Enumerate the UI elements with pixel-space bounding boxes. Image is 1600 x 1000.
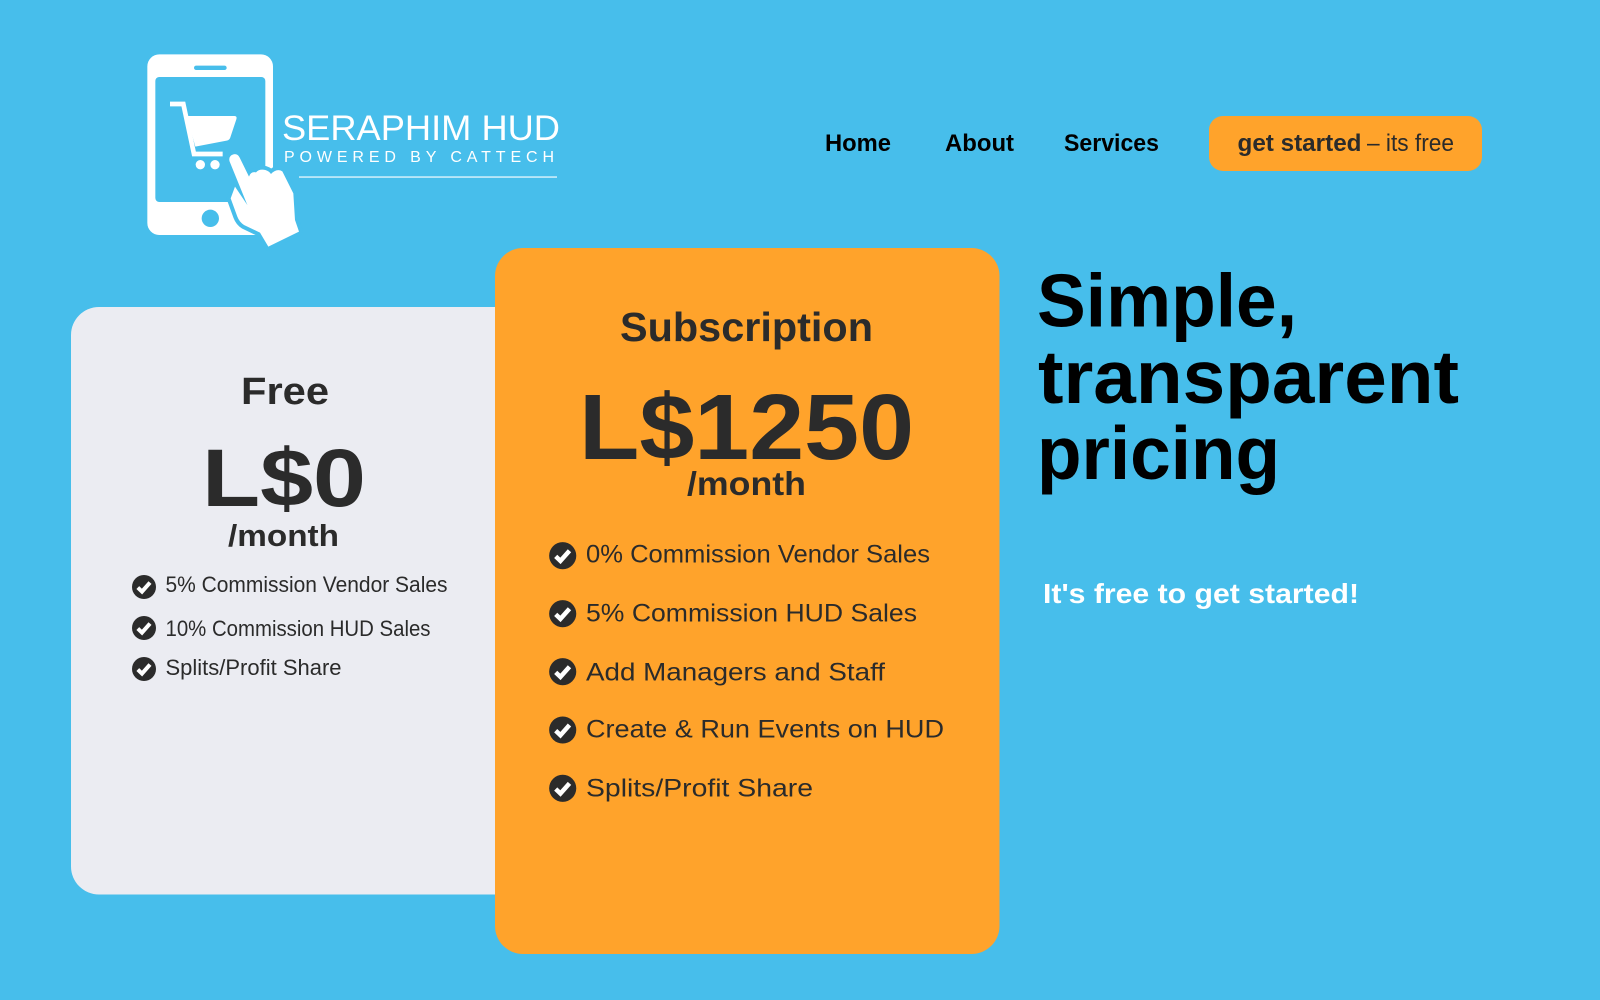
headline: transparent [1038,335,1459,419]
feature list: 0% Commission Vendor Sales [586,541,930,569]
headline: Simple, [1037,259,1297,343]
price: L$0: L$0 [202,433,366,524]
nav link: About: About [945,130,1014,157]
feature list: Create & Run Events on HUD [586,715,944,743]
panel: free plan [71,307,531,894]
feature list: 5% Commission HUD Sales [586,600,917,628]
logo wordmark: SERAPHIM HUD [282,109,560,148]
headline: pricing [1037,411,1280,495]
navigation [825,116,1482,171]
logo tagline: POWERED BY CATTECH [284,149,554,166]
feature list: Splits/Profit Share [586,775,813,803]
button: get started: get started [1238,130,1362,157]
button: get started [1209,116,1482,171]
plan name: Free: Free [241,371,329,413]
feature list: 5% Commission Vendor Sales [166,572,448,597]
subheading: It's free to get started! [1043,578,1359,609]
price period: /month [228,518,339,553]
plan name: Subscription: Subscription [620,304,873,350]
icon: phone with cart and pointing hand [147,54,299,247]
feature list [132,572,448,681]
feature list: 10% Commission HUD Sales [166,616,430,641]
button: get started: – its free [1367,130,1454,157]
nav link: Home: Home [825,130,891,157]
headline [1037,259,1459,495]
feature list [549,541,944,803]
feature list: Splits/Profit Share [166,655,342,680]
logo [147,54,560,247]
price period: /month [687,465,806,502]
panel: subscription plan [495,248,1000,954]
nav link: Services: Services [1064,130,1159,157]
price: L$1250: L$1250 [579,375,914,479]
feature list: Add Managers and Staff [586,659,885,687]
